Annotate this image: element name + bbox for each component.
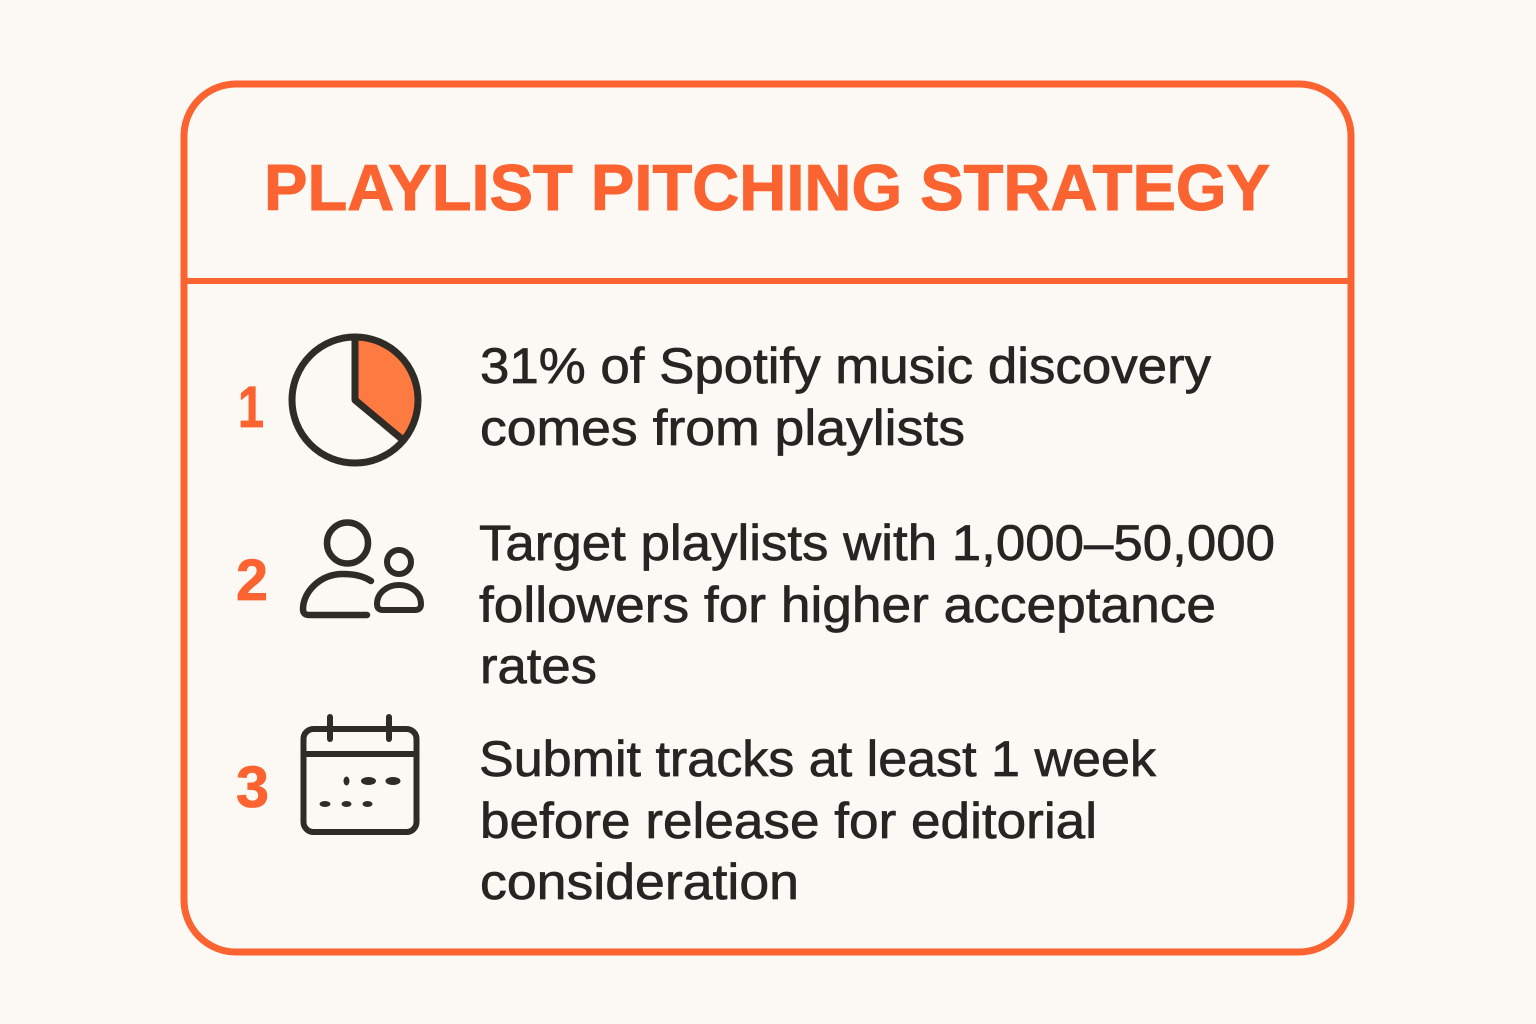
text: discovery statistic: 31% of Spotify music discovery bbox=[480, 338, 1211, 394]
number 1: 1 bbox=[238, 375, 264, 440]
text: submission advice: consideration bbox=[480, 854, 799, 910]
title: PLAYLIST PITCHING STRATEGY bbox=[264, 151, 1270, 224]
item 2: target playlists bbox=[236, 515, 1275, 694]
text: discovery statistic bbox=[480, 338, 1211, 456]
text: follower target: followers for higher acceptance bbox=[479, 577, 1216, 633]
text: follower target: Target playlists with 1,000–50,000 bbox=[479, 515, 1275, 571]
text: submission advice: before release for editorial bbox=[480, 793, 1097, 849]
text: follower target bbox=[479, 515, 1275, 694]
panel: strategy card bbox=[184, 84, 1351, 952]
card frame bbox=[184, 84, 1351, 952]
text: discovery statistic: comes from playlists bbox=[480, 400, 965, 456]
text: submission advice: Submit tracks at least 1 week bbox=[479, 731, 1157, 787]
number 2: 2 bbox=[236, 548, 268, 613]
icon: pie chart bbox=[292, 337, 418, 463]
item 1: playlist discovery bbox=[238, 337, 1211, 463]
text: submission advice bbox=[479, 731, 1157, 910]
icon: calendar bbox=[304, 717, 416, 832]
item 3: submission timing bbox=[236, 717, 1157, 910]
icon: people bbox=[303, 522, 421, 615]
number 3: 3 bbox=[236, 755, 269, 820]
text: follower target: rates bbox=[480, 638, 597, 694]
